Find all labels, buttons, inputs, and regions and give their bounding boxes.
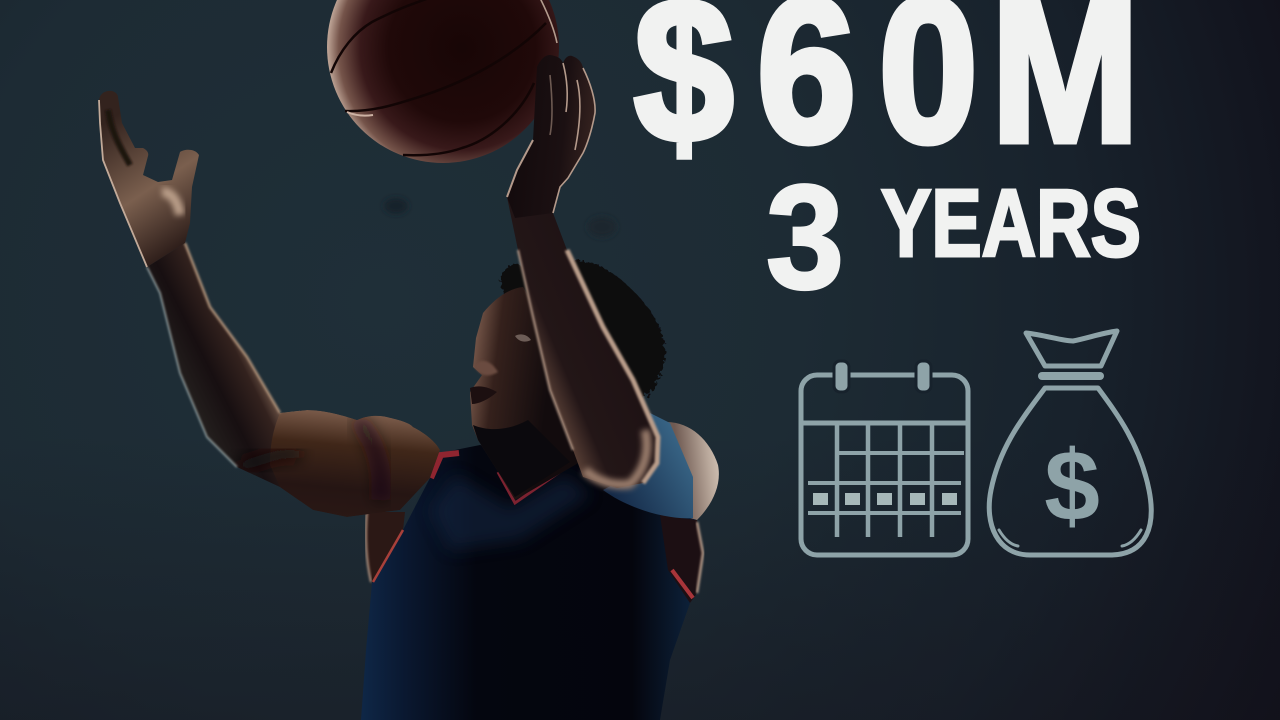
jersey trim [373, 453, 693, 598]
face and neck [470, 287, 600, 500]
contract length: 3 YEARS [766, 155, 1141, 320]
sleeve [603, 413, 693, 518]
jersey fold highlight [430, 475, 590, 550]
shoulder [667, 422, 719, 520]
shooting hand [507, 55, 595, 218]
player [99, 55, 719, 720]
contract length: 3 YEARS: 3 [766, 155, 844, 320]
lower right torso skin [660, 515, 703, 603]
icon: calendar [801, 361, 968, 555]
left hand [99, 91, 199, 267]
left torso skin [366, 512, 405, 583]
hair [500, 260, 665, 410]
basketball [327, 0, 559, 163]
raised left arm [140, 240, 440, 520]
jersey [361, 414, 697, 720]
dollar sign: $ [1044, 430, 1100, 542]
raised right arm [507, 197, 658, 488]
contract length: 3 YEARS: YEARS [881, 170, 1141, 277]
icon: money bag [989, 331, 1151, 555]
